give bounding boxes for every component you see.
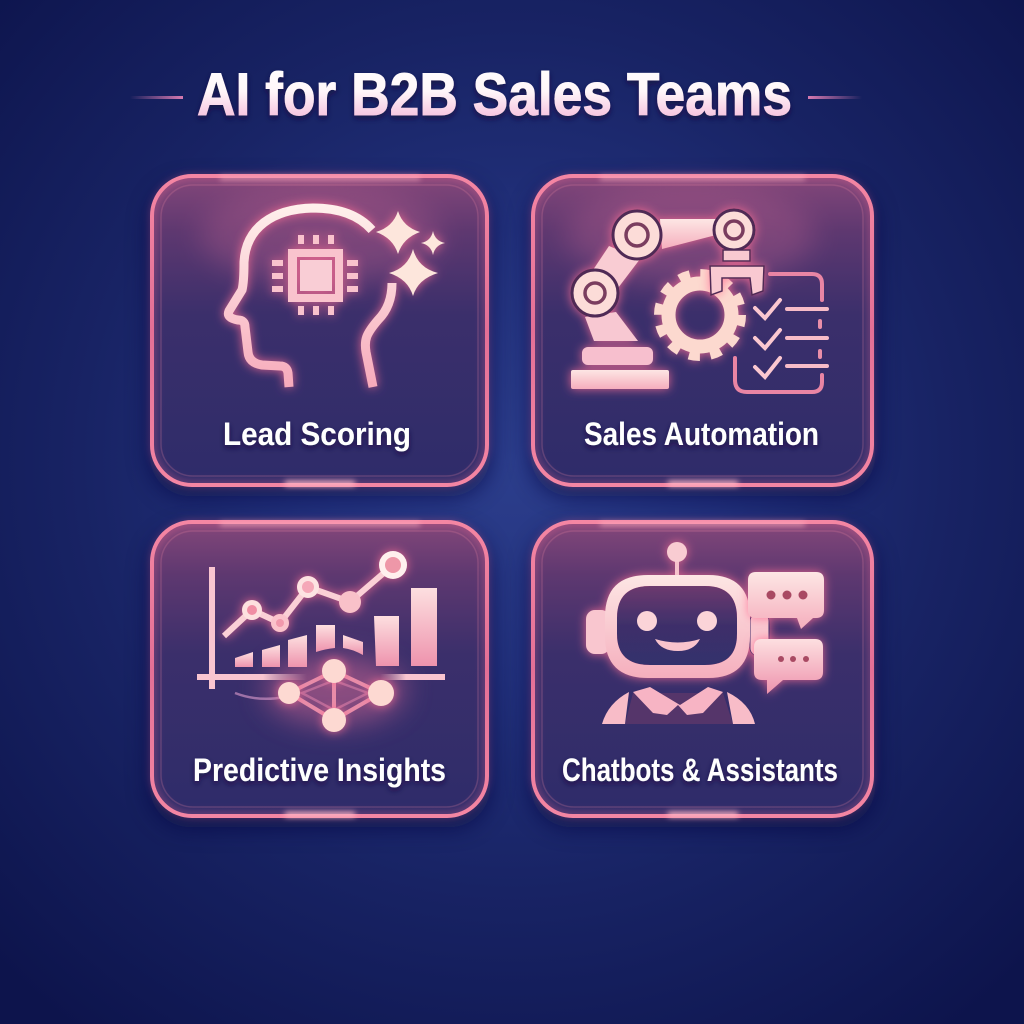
panel: sales automation: [531, 176, 875, 496]
trend line: [224, 551, 407, 636]
label: Lead Scoring: [223, 416, 411, 452]
card frame: [533, 176, 872, 485]
card inner line: [542, 531, 863, 807]
label: Sales Automation: [584, 416, 819, 452]
bottom edge glow: [285, 481, 355, 486]
panel: lead scoring: [150, 176, 490, 496]
card frame: [152, 176, 487, 485]
network: [235, 659, 394, 732]
top edge glow: [220, 176, 420, 180]
robot body: [602, 687, 755, 724]
bottom edge glow: [668, 812, 738, 817]
head outline: [228, 208, 392, 387]
card shadow: [531, 530, 875, 827]
card inner line: [542, 185, 863, 476]
speech bubble large: [748, 572, 824, 629]
top edge glow: [600, 176, 805, 180]
icon backlight: [565, 185, 815, 285]
frame glow: [534, 523, 871, 815]
icon: head with chip and sparkles: [228, 208, 445, 387]
card shadow: [531, 184, 875, 496]
left title accent: [130, 96, 183, 99]
icon backlight: [265, 655, 405, 725]
card frame: [152, 522, 487, 816]
icon: robot arm, gear and checklist: [571, 210, 827, 392]
checklist: [735, 274, 827, 392]
panel: chatbots and assistants: [531, 522, 875, 827]
title: AI for B2B Sales Teams: [197, 61, 792, 128]
frame glow: [153, 523, 486, 815]
icon: chatbot with speech bubbles: [586, 542, 824, 724]
card inner line: [161, 531, 478, 807]
bottom edge glow: [668, 481, 738, 486]
right title accent: [808, 96, 862, 99]
label: Predictive Insights: [193, 752, 446, 788]
card shadow: [150, 530, 490, 827]
icon backlight: [200, 185, 440, 285]
card shadow: [150, 184, 490, 496]
robot head: [586, 542, 769, 678]
bars: [235, 588, 437, 667]
card inner line: [161, 185, 478, 476]
top edge glow: [600, 522, 805, 526]
card frame: [533, 522, 872, 816]
top edge glow: [220, 522, 420, 526]
frame glow: [153, 177, 486, 484]
robot arm: [571, 210, 764, 389]
title group: [130, 61, 862, 128]
icon: chart with neural network: [197, 551, 445, 732]
frame glow: [534, 177, 871, 484]
sparkles: [376, 211, 445, 296]
panel: predictive insights: [150, 522, 490, 827]
chart axes: [197, 567, 445, 689]
chip: [272, 235, 358, 315]
label: Chatbots & Assistants: [562, 752, 838, 788]
gripper: [710, 250, 764, 295]
gear: [659, 274, 741, 356]
speech bubble small: [754, 639, 823, 694]
bottom edge glow: [285, 812, 355, 817]
